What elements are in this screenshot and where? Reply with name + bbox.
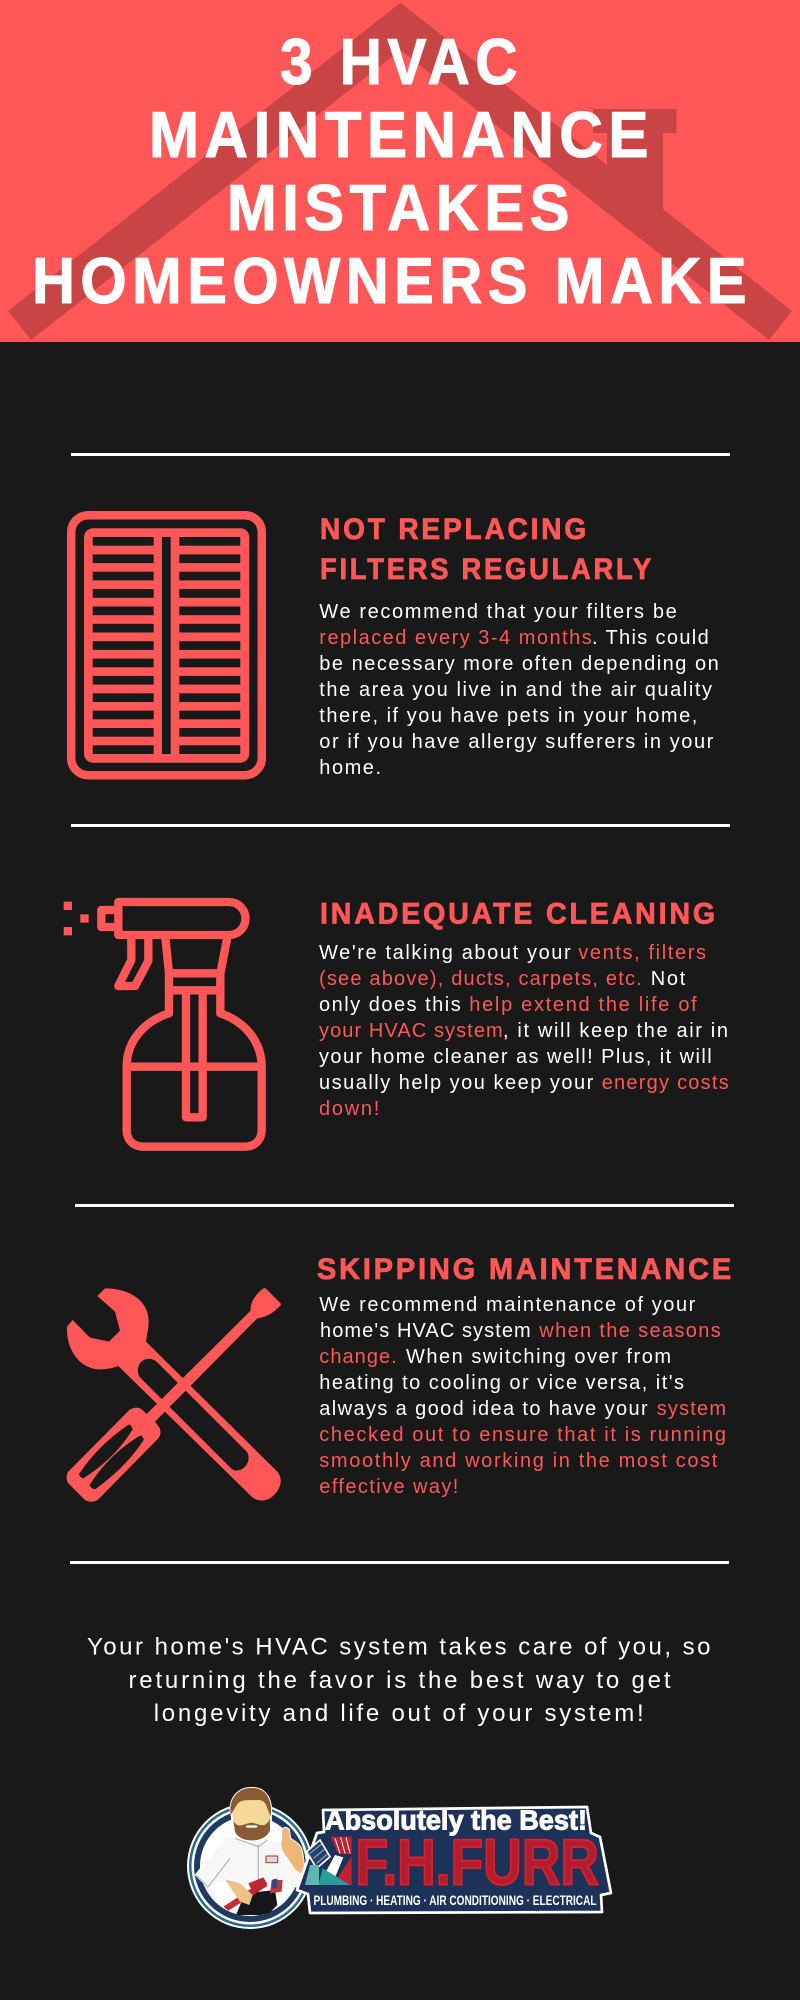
panel: inadequate cleaning: [64, 897, 729, 1147]
panel: skipping maintenance: [67, 1253, 734, 1502]
text block: maintenance: checked out to ensure that it is running: [319, 1424, 726, 1446]
title: 3 HVAC: [280, 25, 523, 98]
text block: filters: there, if you have pets in your home,: [319, 705, 697, 727]
text block: cleaning: Not: [651, 968, 686, 990]
text block: maintenance: [319, 1294, 726, 1498]
icon: air filter: [71, 515, 262, 775]
text block: maintenance: effective way!: [319, 1476, 458, 1498]
closing statement: [87, 1634, 710, 1727]
closing statement: returning the favor is the best way to get: [128, 1667, 671, 1694]
closing statement: longevity and life out of your system!: [154, 1700, 644, 1727]
icon: house roof with chimney: [8, 3, 792, 340]
text block: cleaning: energy costs: [602, 1072, 729, 1094]
text block: maintenance: We recommend maintenance of your: [319, 1294, 696, 1316]
text block: cleaning: (see above), ducts, carpets, etc.: [319, 968, 642, 990]
logo: F.H. Furr: [187, 1788, 611, 1929]
text block: maintenance: smoothly and working in the most cost: [319, 1450, 718, 1472]
text block: maintenance: heating to cooling or vice versa, it's: [319, 1372, 684, 1394]
logo tagline: Absolutely the Best!: [325, 1804, 587, 1836]
logo services line: PLUMBING · HEATING · AIR CONDITIONING · ELECTRICAL: [314, 1892, 597, 1908]
logo flame and ice mark: [305, 1837, 352, 1885]
closing statement: Your home's HVAC system takes care of you, so: [87, 1634, 710, 1661]
heading: not replacing filters regularly: [320, 513, 654, 586]
text block: cleaning: only does this: [319, 994, 461, 1016]
heading: inadequate cleaning: INADEQUATE CLEANING: [320, 897, 718, 930]
text block: maintenance: always a good idea to have your: [319, 1398, 648, 1420]
icon: wrench and screwdriver: [67, 1288, 281, 1502]
text block: maintenance: When switching over from: [406, 1346, 671, 1368]
text block: cleaning: usually help you keep your: [319, 1072, 594, 1094]
text block: cleaning: vents, filters: [578, 942, 706, 964]
header banner: [0, 0, 800, 342]
title: HOMEOWNERS MAKE: [32, 244, 752, 317]
text block: cleaning: your home cleaner as well! Plus, it will: [319, 1046, 712, 1068]
text block: filters: We recommend that your filters be: [319, 601, 677, 623]
title: MISTAKES: [227, 171, 575, 244]
heading: not replacing filters regularly: NOT REPLACING: [320, 513, 589, 546]
text block: maintenance: when the seasons: [538, 1320, 721, 1342]
text block: cleaning: help extend the life of: [469, 994, 697, 1016]
text block: cleaning: your HVAC system: [319, 1020, 503, 1042]
text block: cleaning: down!: [319, 1098, 379, 1120]
text block: maintenance: system: [657, 1398, 726, 1420]
text block: filters: or if you have allergy sufferers in your: [319, 731, 714, 753]
text block: filters: . This could: [592, 627, 709, 649]
text block: maintenance: home's HVAC system: [320, 1320, 531, 1342]
text block: cleaning: We're talking about your: [319, 942, 571, 964]
logo wordmark: F.H.FURR: [356, 1826, 599, 1898]
text block: filters: home.: [319, 757, 381, 779]
logo mascot: [196, 1788, 306, 1915]
logo badge circle: [187, 1803, 313, 1929]
text block: filters: [319, 601, 719, 779]
heading: not replacing filters regularly: FILTERS REGULARLY: [320, 553, 654, 586]
title: [32, 25, 752, 317]
text block: filters: replaced every 3-4 months: [319, 627, 592, 649]
text block: cleaning: , it will keep the air in: [503, 1020, 728, 1042]
icon: spray bottle: [64, 902, 262, 1147]
title: MAINTENANCE: [149, 98, 654, 171]
text block: cleaning: [319, 942, 729, 1120]
heading: skipping maintenance: SKIPPING MAINTENANCE: [317, 1253, 734, 1286]
text block: filters: be necessary more often depending on: [319, 653, 719, 675]
panel: not replacing filters: [71, 513, 719, 779]
text block: filters: the area you live in and the air quality: [319, 679, 712, 701]
text block: maintenance: change.: [319, 1346, 397, 1368]
logo banner: [297, 1807, 611, 1913]
